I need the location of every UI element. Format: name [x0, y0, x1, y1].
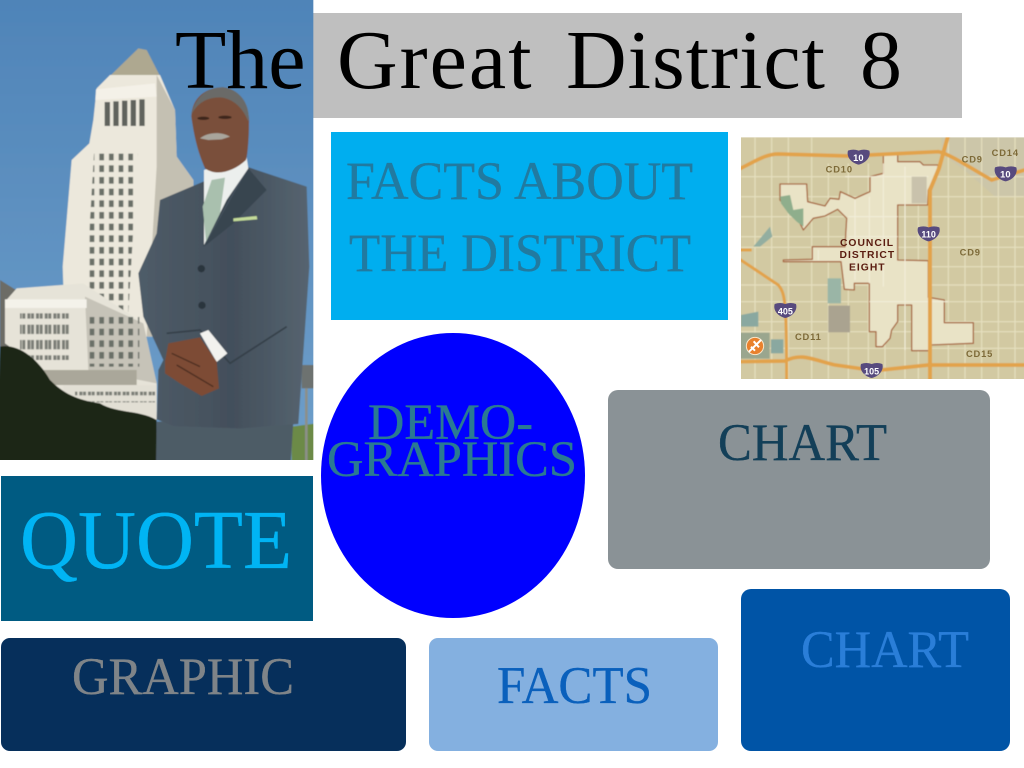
- map label: council district eight: EIGHT: [849, 263, 886, 274]
- icon: highway shield 110: [918, 226, 940, 241]
- map labels: council districts: CD11: [795, 332, 822, 342]
- map labels: council districts: CD14: [992, 148, 1019, 158]
- title: District: [566, 14, 848, 107]
- photo: councilman in front of city hall: [0, 0, 317, 463]
- map: council district eight: [738, 135, 1024, 382]
- map labels: council districts: CD9: [960, 248, 981, 258]
- panel: facts: [429, 638, 718, 751]
- icon: highway shield 10: [848, 150, 870, 165]
- map labels: council districts: CD9: [962, 155, 983, 165]
- icon: highway shield 110: 110: [921, 230, 936, 240]
- map labels: council districts: CD15: [966, 349, 993, 359]
- heading: quote: QUOTE: [20, 494, 292, 587]
- map labels: council districts: [795, 148, 1019, 359]
- icon: highway shield 10 east: [995, 166, 1017, 181]
- heading: chart: CHART: [801, 621, 969, 679]
- title: The: [175, 14, 327, 107]
- icon: highway shield 105: [861, 363, 883, 378]
- panel: chart gray: [608, 390, 990, 569]
- map label: council district eight: DISTRICT: [840, 250, 895, 261]
- heading: graphic: GRAPHIC: [72, 648, 294, 706]
- icon: highway shield 10 east: 10: [1000, 170, 1011, 180]
- heading: facts about: FACTS ABOUT: [346, 151, 693, 211]
- map label: council district eight: COUNCIL: [840, 238, 894, 249]
- panel: graphic: [1, 638, 406, 751]
- panel: quote: [1, 476, 313, 621]
- icon: airport: [746, 337, 764, 355]
- heading: facts: FACTS: [497, 657, 652, 715]
- heading: demo-: DEMO-: [368, 395, 533, 451]
- map label: council district eight: [840, 239, 894, 270]
- icon: highway shield 10: 10: [853, 153, 864, 163]
- icon: highway shield 405: [774, 303, 796, 318]
- heading: chart: CHART: [718, 414, 887, 472]
- heading: the district: THE DISTRICT: [349, 223, 691, 283]
- map labels: council districts: CD10: [826, 165, 853, 175]
- title bar background: [313, 13, 962, 118]
- title: 8: [860, 14, 902, 107]
- icon: highway shield 105: 105: [864, 366, 879, 376]
- panel: demographics circle: [321, 333, 585, 618]
- panel: chart blue: [741, 589, 1010, 751]
- heading: graphics: GRAPHICS: [327, 432, 577, 488]
- icon: highway shield 405: 405: [778, 306, 793, 316]
- title: Great: [337, 14, 557, 107]
- panel: facts about the district: [331, 132, 728, 320]
